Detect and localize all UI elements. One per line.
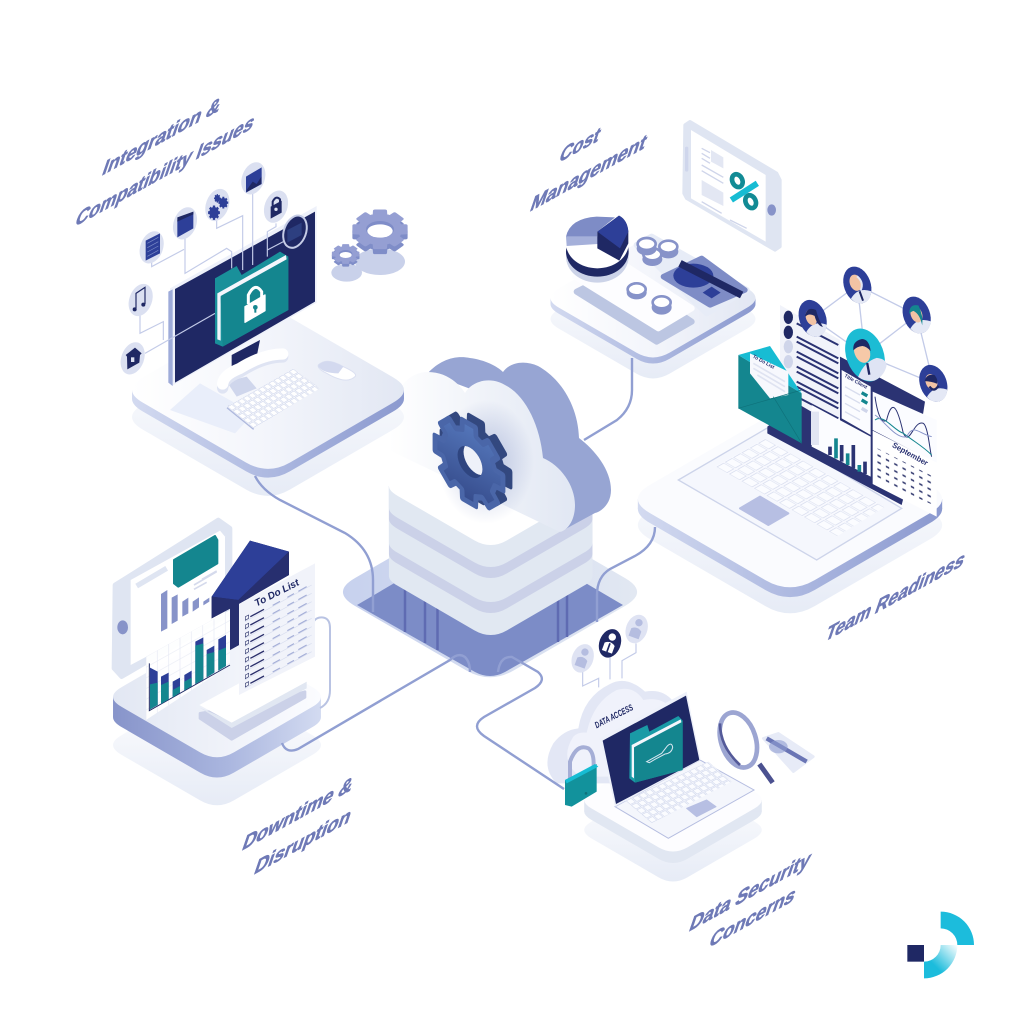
icon: folder bbox=[169, 204, 201, 243]
panel: cost management bbox=[551, 122, 780, 378]
laptop bbox=[599, 692, 754, 838]
avatar: woman with teal hair bbox=[898, 293, 936, 337]
connector: cost to cloud bbox=[584, 358, 632, 440]
magnifying glass bbox=[713, 708, 773, 783]
connector: integration to cloud bbox=[255, 476, 373, 612]
laptop base bbox=[678, 428, 902, 560]
tablet bbox=[114, 520, 230, 677]
cloud back side bbox=[428, 357, 611, 532]
keyboard bbox=[227, 368, 320, 430]
calendar panel bbox=[873, 431, 937, 517]
label: management: Management bbox=[527, 128, 651, 217]
avatar icons bbox=[568, 612, 652, 676]
cloud: data access: DATA ACCESS bbox=[593, 702, 635, 730]
icon connector lines bbox=[140, 193, 283, 353]
list panel bbox=[780, 305, 840, 428]
panel: data security bbox=[547, 612, 813, 882]
connector: data security to cloud bbox=[477, 657, 564, 789]
label: concerns: Concerns bbox=[706, 881, 800, 953]
panel: central cloud server stack bbox=[389, 357, 611, 635]
logo bbox=[907, 912, 974, 978]
connector: downtime to cloud bbox=[282, 655, 470, 751]
label: cost: Cost bbox=[556, 121, 605, 168]
laptop screen bbox=[767, 357, 925, 505]
card bbox=[763, 733, 813, 772]
icon: locked folder bbox=[215, 252, 288, 347]
icon: window bbox=[279, 212, 311, 251]
icon: large gears bbox=[331, 211, 406, 282]
mouse bbox=[318, 361, 356, 380]
envelope: To Do List bbox=[751, 354, 776, 371]
avatar: bearded man bbox=[914, 361, 952, 406]
avatar: woman with glasses bbox=[794, 296, 832, 341]
platform bbox=[638, 411, 942, 613]
label: integration: Integration & bbox=[99, 91, 225, 181]
platform bbox=[584, 748, 762, 882]
stacked bar chart bbox=[146, 610, 230, 720]
server layers bbox=[389, 427, 592, 635]
tablet with percent bbox=[684, 122, 780, 250]
avatar: older man bbox=[838, 263, 876, 307]
navy block bbox=[212, 541, 289, 650]
icon: document bbox=[135, 228, 168, 267]
label: downtime: Downtime & bbox=[239, 771, 357, 856]
icon: music bbox=[124, 280, 157, 320]
label: disruption: Disruption bbox=[251, 802, 355, 880]
monitor bbox=[168, 206, 317, 397]
label: data security: Data Security bbox=[686, 845, 815, 937]
panel: integration and compatibility bbox=[116, 159, 406, 496]
panel: central pit plate bbox=[343, 507, 637, 677]
icon: lock bbox=[260, 187, 292, 226]
calendar panel: September bbox=[891, 441, 930, 468]
icon: image bbox=[237, 159, 270, 198]
people network lines bbox=[813, 285, 933, 383]
platform bbox=[132, 311, 404, 496]
access connector lines bbox=[583, 643, 636, 687]
to do list bbox=[239, 563, 315, 695]
cloud: data access bbox=[547, 681, 673, 783]
bar chart panel bbox=[812, 405, 871, 477]
form panel: Title Client bbox=[843, 373, 868, 391]
connector: to-do loop bbox=[314, 617, 330, 708]
coins bbox=[627, 238, 678, 315]
label: team readiness: Team Readiness bbox=[822, 545, 969, 647]
panel: team readiness bbox=[638, 263, 952, 613]
label: compatibility: Compatibility Issues bbox=[72, 109, 258, 232]
pie chart bbox=[566, 216, 629, 283]
icon: gear bbox=[432, 412, 512, 510]
credit card bbox=[663, 258, 745, 305]
to do list: To Do List bbox=[253, 577, 302, 609]
connector: team to cloud bbox=[597, 527, 655, 622]
padlock bbox=[565, 747, 598, 807]
avatar: central man bbox=[838, 323, 892, 387]
line chart panel bbox=[873, 392, 937, 463]
device stand bbox=[199, 657, 307, 739]
platform bbox=[551, 239, 755, 378]
cloud front face bbox=[389, 372, 575, 532]
platform bbox=[113, 637, 321, 805]
form panel bbox=[842, 370, 871, 435]
icon: gears bbox=[201, 185, 234, 225]
folder with key bbox=[629, 716, 683, 783]
icon: home bbox=[116, 339, 149, 378]
envelope bbox=[738, 346, 802, 443]
panel: downtime and disruption bbox=[113, 520, 330, 805]
